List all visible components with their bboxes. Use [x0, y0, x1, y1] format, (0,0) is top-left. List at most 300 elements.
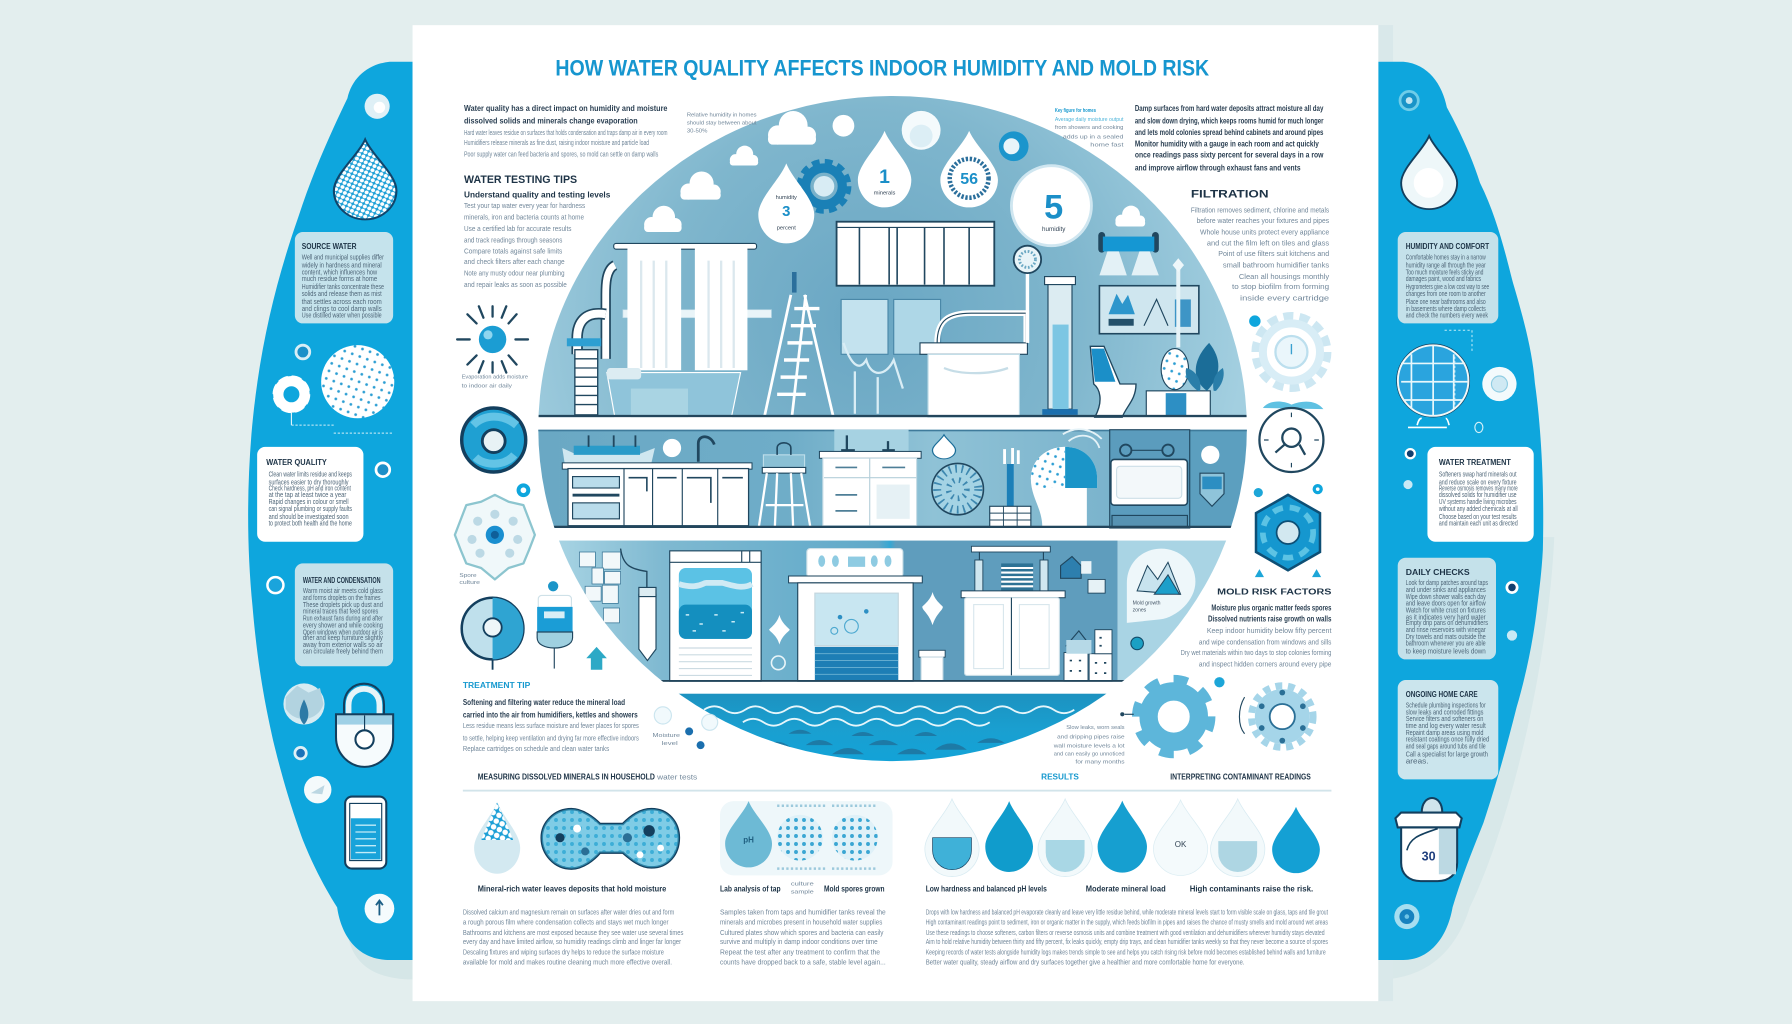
left card: overview [295, 232, 393, 323]
left card: water quality: Clean water limits residue and keeps [269, 471, 352, 479]
section header row: water tests [656, 772, 698, 781]
panel: mold risk text: Moisture plus organic matter feeds spores [1211, 603, 1332, 612]
stove and oven [789, 549, 922, 681]
small filter [1200, 473, 1224, 506]
icon: pale gear [1249, 315, 1325, 385]
right card: daily checks: as it indicates very hard water [1406, 613, 1486, 621]
panel: filtration: before water reaches your fixtures and pipes [1197, 216, 1329, 225]
right icon: bottom ring [1394, 904, 1419, 929]
text column 3: High contaminant readings point to sediment, iron or organic matter in the supply, which feeds biofilm in pipes and raises the chance of musty smells and mold around wet areas [926, 918, 1328, 927]
left card: water and condensation: Run exhaust fans during and after [303, 615, 383, 623]
panel: filtration: Filtration removes sediment, chlorine and metals [1191, 206, 1329, 215]
text column 1: Bathrooms and kitchens are most exposed because they see water use several times [463, 928, 684, 937]
right card: humidity: Hygrometers give a low cost way to see [1406, 283, 1489, 291]
captions under icons: Lab analysis of tap [720, 884, 781, 893]
left card: water quality: to protect both health and the home [269, 520, 352, 528]
panel: treatment options: Softening and filtering water reduce the mineral load [463, 698, 625, 707]
icon: hexagon sensor [1256, 495, 1320, 570]
right card: treatment [1427, 447, 1534, 542]
panel: filtration [1191, 189, 1330, 303]
text column 1: every day and have limited airflow, so humidity readings climb and linger far longer [463, 937, 682, 946]
drop stat: 56: 56 [960, 171, 978, 188]
right card: ongoing care: Service filters and softeners on [1406, 715, 1483, 723]
text column 2: counts have dropped back to a safe, stable level again... [720, 958, 886, 967]
white circle marker [663, 439, 681, 457]
big stat circle: 5: 5 [1044, 188, 1063, 226]
white center page [413, 25, 1378, 1001]
text column 3 [926, 907, 1328, 967]
panel: water testing: minerals, iron and bacteria counts at home [464, 212, 584, 221]
right card: ongoing care: time and log every water result [1406, 722, 1486, 730]
right card: daily checks: Watch for white crust on fixtures [1406, 607, 1486, 615]
drop stat: 1 [858, 131, 911, 207]
panel: filtration: inside every cartridge [1240, 294, 1329, 303]
right card: daily checks: and rinse reservoirs with vinegar [1406, 626, 1486, 634]
filter cylinder [621, 549, 656, 661]
text column 3: Better water quality, steady airflow and dry surfaces together give a healthier and more comfortable home for everyone. [926, 958, 1245, 967]
panel: mold risk text [1181, 586, 1332, 668]
left card: water and condensation: and forms droplets on the frames [303, 594, 381, 602]
small note top-left: Relative humidity in homes [687, 113, 757, 119]
drop stat: 3 [758, 163, 814, 243]
right icon: top ring [1400, 91, 1418, 110]
icon: drop with petri dishes: pH [743, 835, 754, 844]
small caption under spore: Spore [459, 573, 477, 579]
right card: ongoing care: resistant coatings once fully dried [1406, 736, 1489, 744]
panel: water testing: Understand quality and testing levels [464, 190, 610, 200]
right card: humidity [1398, 232, 1498, 323]
left card: water and condensation: These droplets pick up dust and [303, 601, 383, 609]
captions under icons: sample [791, 890, 814, 896]
icon: filter jug [537, 581, 573, 669]
left icon: ring small [376, 463, 390, 477]
stool with basket [759, 443, 810, 527]
small bucket [919, 650, 945, 681]
text column 1 [463, 907, 684, 967]
right card: humidity: and check the numbers every week [1406, 312, 1488, 320]
small house blocks [1061, 557, 1112, 681]
brush holder [990, 448, 1031, 527]
icon: small blue tag left [517, 483, 530, 497]
wall tiles [579, 552, 621, 623]
caption under sun droplet: Evaporation adds moisture [462, 374, 528, 380]
text column 3: Aim to hold relative humidity between thirty and fifty percent, fix leaks quickly, empty drip trays, and clean humidifier tanks weekly so that they never become a source of spores [926, 937, 1328, 946]
left card: water and condensation: away from exterior walls so air [303, 641, 383, 649]
icon: sun droplet [457, 306, 528, 373]
right card: daily checks [1398, 558, 1496, 659]
icon: mini droplets: Moisture [653, 733, 680, 739]
panel: water testing [464, 174, 610, 289]
panel: treatment options [463, 680, 639, 753]
text column 3: Use these readings to choose softeners, carbon filters or reverse osmosis units and combine treatment with good ventilation and dehumidifiers wherever humidity stays elevated [926, 928, 1325, 937]
text column 2 [720, 907, 886, 967]
left card: overview: Use distilled water when possible [302, 312, 382, 320]
left card: water quality: surfaces easier to dry thoroughly [269, 479, 349, 487]
panel: treatment options: carried into the air from humidifiers, kettles and showers [463, 711, 638, 720]
right card: daily checks: DAILY CHECKS [1406, 567, 1470, 577]
top-right small note: Average daily moisture output [1055, 117, 1124, 123]
panel: filtration: small bathroom humidifier tanks [1223, 260, 1329, 269]
icon: mold spore flower [455, 495, 535, 579]
captions under icons: Mineral-rich water leaves deposits that hold moisture [478, 884, 667, 893]
left card: overview: content, which influences how [302, 268, 378, 276]
left icon: ring outline [267, 577, 283, 593]
top-left intro text: Hard water leaves residue on surfaces that holds condensation and traps damp air in every room [464, 128, 667, 137]
text column 2: minerals and microbes present in household water supplies [720, 918, 883, 927]
top-right intro text: and improve airflow through exhaust fans and vents [1135, 163, 1301, 172]
captions under icons: Mold spores grown [824, 884, 885, 893]
icon: clock gauge [1259, 401, 1323, 472]
dark wave crests [731, 730, 1057, 754]
top-left intro text: Water quality has a direct impact on humidity and moisture [464, 104, 668, 113]
panel: mold risk text: MOLD RISK FACTORS [1217, 586, 1332, 596]
right card: ongoing care: ONGOING HOME CARE [1406, 689, 1478, 699]
wall lamp [1098, 232, 1159, 275]
right card: daily checks: Look for damp patches around taps [1406, 579, 1488, 587]
wave lines [704, 706, 1074, 726]
small note lower right: wall moisture levels a lot [1053, 743, 1125, 749]
icon: half dotted drop [474, 802, 520, 874]
right card: treatment: Reverse osmosis removes many more [1439, 484, 1518, 492]
shower head with spray [1031, 429, 1102, 527]
left card: water quality: Rapid changes in colour or smell [269, 498, 349, 506]
text column 3: Drops with low hardness and balanced pH evaporate cleanly and leave very little residue behind, while moderate mineral levels start to form visible scale on glass, taps and tile grout [926, 907, 1328, 916]
top-left intro text: Poor supply water can feed bacteria and spores, so mold can settle on damp walls [464, 150, 659, 159]
right card: treatment: and maintain each unit as directed [1439, 520, 1518, 528]
right card: ongoing care [1398, 680, 1498, 779]
gear icon [802, 165, 846, 208]
right icon: globe [1397, 330, 1472, 427]
captions under icons [478, 882, 1313, 896]
captions under icons: High contaminants raise the risk. [1190, 884, 1313, 893]
left icon: white pebble [304, 776, 331, 803]
right card: humidity: Comfortable homes stay in a narrow [1406, 253, 1486, 261]
diamond droplets [769, 592, 943, 670]
ladder [765, 272, 833, 416]
top-right small note: home fast [1090, 142, 1124, 148]
right card: daily checks: and leave doors open for airflow [1406, 600, 1486, 608]
left icon: dotted drop [334, 139, 396, 219]
panel: mold risk text: and wipe condensation from windows and sills [1199, 638, 1332, 647]
panel: water testing: and repair leaks as soon as possible [464, 280, 567, 289]
oven and microwave panel [1110, 430, 1190, 528]
caption under sun droplet: to indoor air daily [462, 383, 512, 389]
right card: treatment: and reduce scale on every fixture [1439, 479, 1517, 487]
left icon: top bubble [365, 94, 390, 119]
right card: treatment: Softeners swap hard minerals out [1439, 471, 1517, 479]
sink basin [562, 435, 655, 463]
left card: water and condensation: WATER AND CONDENSATION [303, 575, 381, 585]
icon: mini droplets [653, 707, 718, 749]
right card: humidity: Place one near bathrooms and also [1406, 298, 1486, 306]
measuring tube [1042, 277, 1078, 415]
text column 2: survive and multiply in damp indoor conditions over time [720, 937, 878, 946]
right icon: dots [1403, 449, 1415, 489]
top-right small note: from showers and cooking [1055, 125, 1123, 131]
right card: daily checks: Dry towels and mats outside the [1406, 633, 1486, 641]
left blue band [248, 62, 413, 960]
section header row [478, 772, 1311, 781]
top-right intro text: once readings pass sixty percent for several days in a row [1135, 151, 1324, 160]
top-right intro text: Monitor humidity with a gauge in each room and act quickly [1135, 139, 1319, 148]
right card: treatment: UV systems handle living microbes [1439, 498, 1517, 506]
section divider [463, 790, 1331, 792]
panel: mold risk text: Dissolved nutrients raise growth on walls [1208, 615, 1332, 624]
top-right small note: adds up in a sealed [1063, 134, 1123, 140]
section header row: INTERPRETING CONTAMINANT READINGS [1170, 772, 1311, 781]
icon: mold capsule [542, 809, 679, 869]
icon: row of seven drops: OK [1175, 840, 1187, 849]
icon: drop with petri dishes [720, 801, 893, 875]
kitchen counter cabinets [562, 463, 752, 526]
left card: water and condensation: mineral traces that feed spores [303, 608, 379, 616]
panel: treatment options: TREATMENT TIP [463, 680, 531, 690]
right card: humidity: HUMIDITY AND COMFORT [1406, 241, 1490, 251]
right card: treatment: dissolved solids for humidifier use [1439, 491, 1517, 499]
white circle right [1201, 446, 1219, 464]
left card: overview: Well and municipal supplies differ [302, 253, 384, 261]
mountain callout: Mold growth [1133, 601, 1161, 607]
right card: ongoing care: Call a specialist for large growth [1406, 751, 1488, 759]
left card: water and condensation: can circulate freely behind them [303, 648, 383, 656]
left card: water quality: WATER QUALITY [266, 457, 327, 467]
page edge shadows [1378, 25, 1393, 1001]
panel: treatment options: Less residue means less surface moisture and fewer places for spores [463, 721, 639, 730]
right card: ongoing care: Schedule plumbing inspections for [1406, 701, 1486, 709]
icon: up arrow [586, 647, 607, 670]
toilet [1090, 346, 1136, 417]
captions under icons: Low hardness and balanced pH levels [926, 884, 1047, 893]
pressure gauge [1014, 246, 1041, 343]
panel: water testing: Note any musty odour near plumbing [464, 268, 565, 277]
icon: blue gear [1120, 677, 1225, 751]
left icon: dotted sphere [321, 345, 394, 418]
top-right intro text: Damp surfaces from hard water deposits attract moisture all day [1135, 104, 1324, 113]
bathtub [607, 368, 741, 417]
panel: treatment options: Replace cartridges on schedule and clean water tanks [463, 744, 609, 753]
wall picture with mountains [1099, 286, 1199, 334]
panel: water testing: Compare totals against safe limits [464, 247, 563, 256]
ring marker [1131, 637, 1143, 650]
small note lower right: Slow leaks, worn seals [1066, 725, 1125, 731]
left card: overview: solids and release them as mist [302, 290, 382, 298]
left card: overview: widely in hardness and mineral [301, 261, 382, 269]
shower rail and curtains [614, 243, 757, 370]
panel: mold risk text: Keep indoor humidity below fifty percent [1207, 626, 1331, 635]
small caption under spore: culture [459, 580, 480, 586]
icon: small blue dots right [1254, 484, 1323, 577]
panel: filtration: FILTRATION [1191, 189, 1269, 201]
text column 2: Cultured plates show which spores and bacteria can easily [720, 928, 884, 937]
top-left intro text: Humidifiers release minerals as fine dust, raising indoor moisture and particle load [464, 138, 649, 147]
left card: water and condensation: every shower and while cooking [303, 621, 383, 629]
top-right small note: Key figure for homes [1055, 108, 1096, 114]
text column 1: a rough porous film where condensation collects and stays wet much longer [463, 918, 669, 927]
big stat circle: 5 [1011, 166, 1091, 246]
sink vanity [920, 313, 1027, 417]
plant and storage box [1146, 343, 1224, 416]
right icon: white dial [1475, 367, 1517, 433]
left card: overview: SOURCE WATER [302, 241, 357, 251]
central circular scene [526, 91, 1269, 765]
text column 2: Samples taken from taps and humidifier tanks reveal the [720, 907, 886, 916]
right card: daily checks: to keep moisture levels down [1406, 648, 1486, 656]
panel: water testing: Test your tap water every year for hardness [464, 201, 585, 210]
left card: water quality: and should be investigated soon [269, 513, 349, 521]
section header row: RESULTS [1041, 772, 1079, 781]
right card: ongoing care: slow leaks and corroded fittings [1406, 708, 1484, 716]
drop stat: 1: 1 [879, 166, 890, 188]
small note lower right [1053, 725, 1125, 765]
mountain callout: zones [1133, 607, 1147, 613]
text column 1: Descaling fixtures and wiping surfaces dry helps to reduce the surface moisture [463, 947, 664, 956]
right card: ongoing care: and seal gaps around tubs and tile [1406, 743, 1486, 751]
panel: filtration: and cut the film left on tiles and glass [1207, 239, 1329, 248]
right card: daily checks: and under sinks and appliances [1406, 586, 1486, 594]
drop stat: 1: minerals [874, 190, 895, 196]
right card: humidity: humidity range all through the year [1406, 261, 1486, 269]
left icon: small ring [295, 747, 306, 759]
right card: ongoing care: Repaint damp areas using mold [1406, 729, 1483, 737]
left icon: phone meter [345, 797, 386, 869]
panel: mold risk text: Dry wet materials within two days to stop colonies forming [1181, 648, 1331, 657]
text column 1: available for mold and makes routine cleaning much more effective overall. [463, 958, 672, 967]
faucet [698, 437, 714, 462]
right side band shadow [1378, 537, 1554, 979]
right icon: white dots [1507, 582, 1517, 641]
panel: filtration: to stop biofilm from forming [1232, 282, 1329, 291]
drop stat: 56 [940, 131, 998, 207]
text column 2: Repeat the test after any treatment to confirm that the [720, 947, 880, 956]
shelves and louver [971, 546, 1050, 592]
washing machine [670, 551, 761, 681]
left icon: ring [296, 345, 310, 359]
big stat circle: 5: humidity [1042, 226, 1066, 233]
left card: water and condensation: Open windows when outdoor air is [303, 628, 383, 636]
text column 3: Keeping records of water tests alongside humidity logs makes trends simple to see and helps you catch rising risk before mold becomes established behind walls and furniture [926, 947, 1326, 956]
panel: water testing: and check filters after each change [464, 257, 565, 266]
left card: overview: Humidifier tanks concentrate these [302, 283, 384, 291]
top-right intro text [1135, 104, 1324, 172]
panel: treatment options: to settle, helping keep ventilation and drying far more effective indoors [463, 734, 639, 743]
left card: water and condensation: drier and keep furniture slightly [303, 634, 383, 642]
right card: humidity: changes from one room to another [1406, 290, 1486, 298]
section header row: MEASURING DISSOLVED MINERALS IN HOUSEHOLD [478, 772, 655, 781]
right blue band [1378, 62, 1543, 960]
drop icon [932, 435, 956, 459]
panel: filtration: Whole house units protect every appliance [1200, 227, 1329, 236]
drop stat: 3: 3 [782, 204, 790, 220]
right card: treatment: Choose based on your test results [1439, 513, 1517, 521]
panel: water testing: WATER TESTING TIPS [464, 174, 577, 186]
right card: daily checks: Wipe down shower walls each day [1406, 593, 1486, 601]
right icon: water tank 30 [1395, 798, 1462, 881]
water base section [669, 694, 1117, 765]
panel: mold risk text: and inspect hidden corners around every pipe [1199, 659, 1331, 668]
panel: filtration: Point of use filters suit kitchens and [1218, 249, 1329, 258]
small note lower right: and can easily go unnoticed [1054, 751, 1125, 757]
left icon: mountain disc [283, 683, 325, 725]
middle section: kitchen row [526, 429, 1269, 528]
right card: daily checks: bathroom whenever you are able [1406, 640, 1486, 648]
top-right small note [1055, 108, 1124, 148]
panel: water testing: and track readings through seasons [464, 235, 563, 244]
windows with condensation [841, 299, 941, 414]
small note top-left: 30-50% [687, 129, 707, 135]
icon: mini droplets: level [662, 741, 678, 747]
right card: ongoing care: areas. [1406, 757, 1429, 765]
small note top-left: should stay between about [687, 121, 757, 127]
right card: humidity: damages paint, wood and fabrics [1406, 275, 1481, 283]
sensor on stem [1161, 258, 1189, 390]
right icon: water tank 30: 30 [1422, 850, 1436, 864]
title: HOW WATER QUALITY AFFECTS INDOOR HUMIDITY AND MOLD RISK [555, 55, 1209, 80]
lower section: laundry and kitchen row [549, 541, 1246, 682]
mold magnifier circle [932, 463, 983, 515]
icon: row of seven drops [925, 799, 1320, 877]
base cabinet [961, 591, 1065, 675]
back pipe [623, 310, 771, 318]
left icon: pin circle [365, 894, 394, 923]
small note top-left [687, 113, 757, 135]
left card: water and condensation: Warm moist air meets cold glass [303, 587, 383, 595]
captions under icons: Moderate mineral load [1086, 884, 1166, 893]
right icon: white drop [1401, 136, 1457, 209]
left side band shadow [337, 891, 413, 979]
drop stat: 3: humidity [776, 195, 797, 201]
right card: treatment: without any added chemicals at all [1438, 505, 1518, 513]
left card: overview: much residue forms at home [302, 275, 377, 283]
icon: half dial [462, 598, 523, 670]
pipes left [567, 265, 615, 415]
left caption dotted lines [291, 425, 392, 433]
small note lower right: and dripping pipes raise [1057, 734, 1125, 740]
drop stat: 3: percent [777, 226, 796, 232]
upper dome: bathroom section [526, 91, 1257, 417]
clouds [644, 111, 1145, 232]
left card: water quality: Check hardness, pH and iron content [269, 484, 351, 492]
humidity bubbles [830, 111, 1029, 161]
top-left intro text: dissolved solids and minerals change evaporation [464, 116, 638, 125]
left card: water quality: at the tap at least twice a year [269, 491, 347, 499]
right card: treatment: WATER TREATMENT [1439, 457, 1511, 467]
left icon: padlock [336, 684, 393, 767]
left icon: white gear [275, 378, 307, 425]
left card: overview: that settles across each room [302, 298, 382, 306]
left card: overview: and clings to cool damp walls [302, 305, 382, 313]
small caption under spore [459, 573, 480, 586]
right card: humidity: in basements where damp collects [1406, 305, 1486, 313]
text column 1: Dissolved calcium and magnesium remain on surfaces after water dries out and form [463, 907, 674, 916]
small note lower right: for many months [1075, 759, 1125, 765]
icon: blue donut valve [462, 408, 526, 472]
upper cabinet [837, 222, 994, 286]
caption under sun droplet [462, 374, 528, 389]
top-left intro text [464, 104, 668, 159]
mountain callout [1127, 549, 1195, 623]
top-right intro text: and lets mold colonies spread behind cabinets and around pipes [1135, 128, 1324, 137]
panel: filtration: Clean all housings monthly [1239, 272, 1329, 281]
left card: water and condensation [295, 563, 393, 666]
captions under icons: culture [791, 882, 814, 888]
left card: water quality [257, 447, 363, 542]
right card: humidity: Too much moisture feels sticky and [1406, 268, 1483, 276]
panel: water testing: Use a certified lab for accurate results [464, 224, 572, 233]
bathroom vanity [819, 430, 921, 526]
left card: water quality: can signal plumbing or supply faults [269, 505, 352, 513]
top-right intro text: and slow down drying, which keeps rooms humid for much longer [1135, 116, 1324, 125]
right card: daily checks: Empty drip pans on dehumidifiers [1406, 619, 1488, 627]
